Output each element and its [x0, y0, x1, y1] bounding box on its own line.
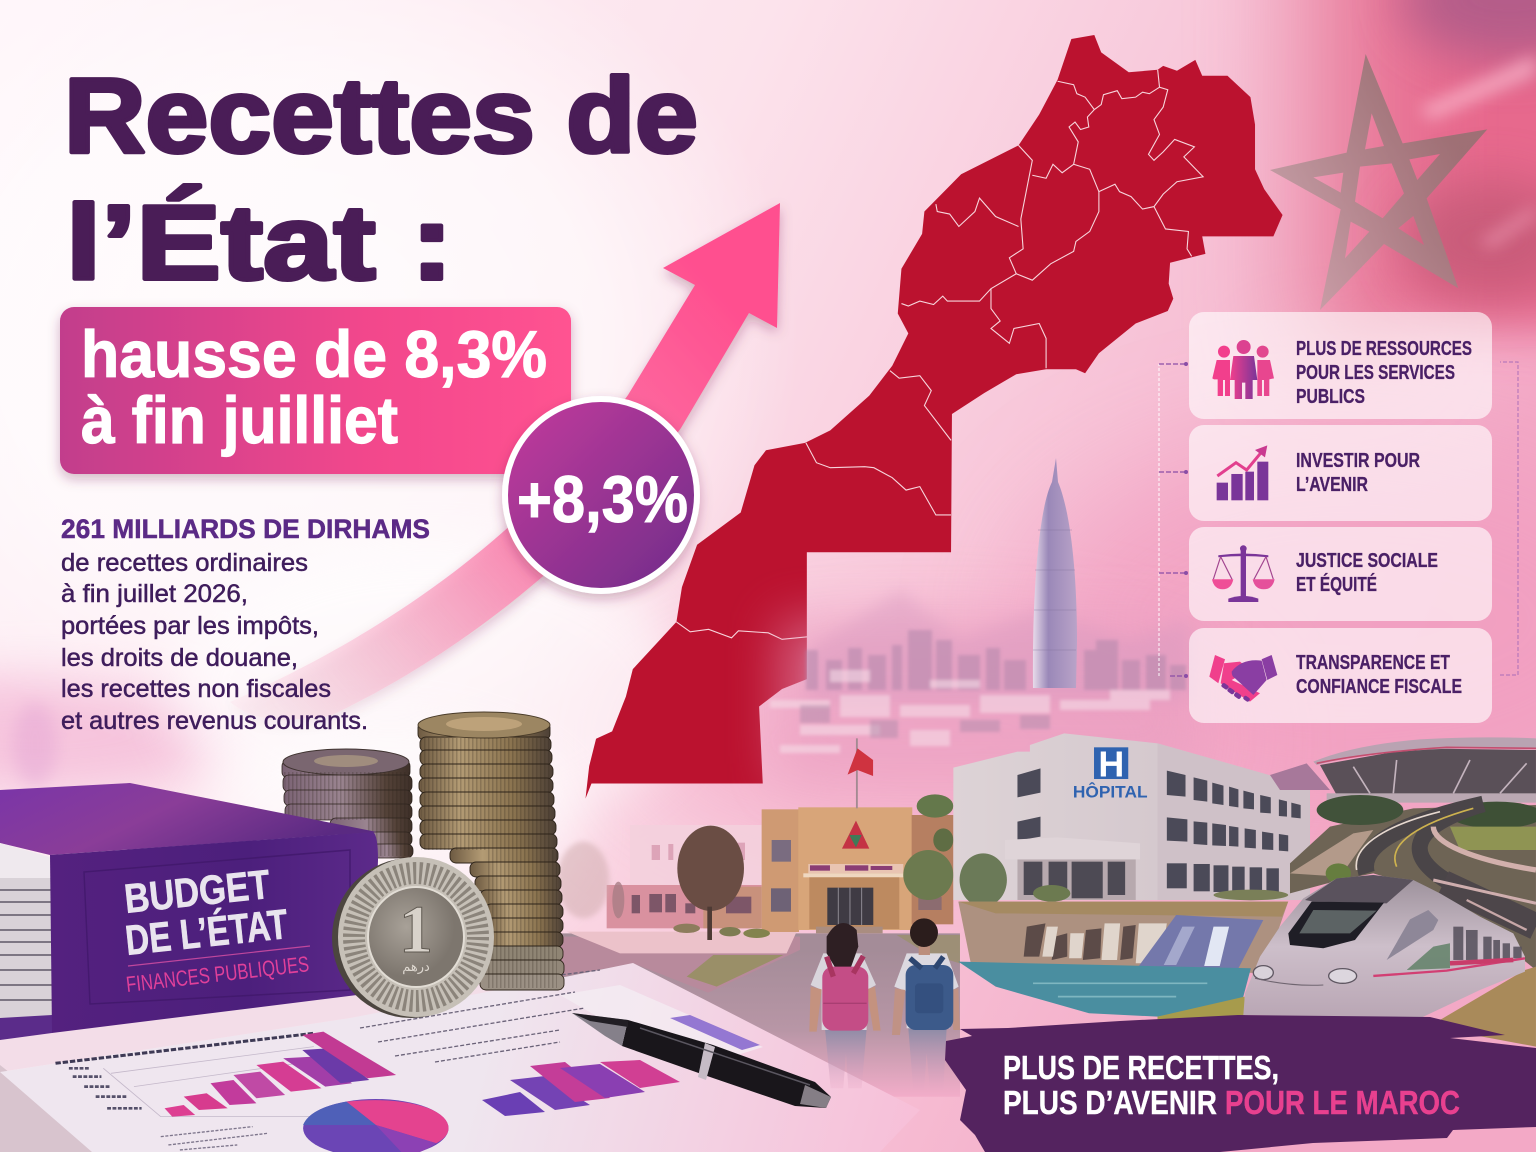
card: justice: JUSTICE SOCIALE: [1296, 550, 1438, 572]
flag: [848, 738, 873, 808]
headline pill: à fin juilliet: [81, 383, 398, 457]
description text: les droits de douane,: [61, 644, 298, 672]
second sheet lines: [360, 970, 600, 1062]
growth arrow: [230, 203, 780, 720]
card: services publics: PLUS DE RESSOURCES: [1296, 338, 1472, 360]
description text: les recettes non fiscales: [61, 675, 331, 703]
closing banner: PLUS D’AVENIR: [1003, 1084, 1217, 1121]
scene: hospital, waterfall and trees: [953, 733, 1310, 1020]
card: transparence: TRANSPARENCE ET: [1296, 652, 1450, 674]
card: justice: ET ÉQUITÉ: [1296, 573, 1377, 596]
closing banner: POUR LE MAROC: [1225, 1084, 1460, 1121]
+8,3% badge: [505, 399, 697, 591]
lake: [958, 962, 1251, 1020]
description text: portées par les impôts,: [61, 612, 319, 640]
small coin stack: [282, 749, 413, 858]
hospital: HÔPITAL: [1073, 781, 1148, 801]
panel: benefits cards: [1189, 312, 1492, 723]
charts and tables on paper: [55, 1032, 449, 1152]
trees and shrubs: [673, 794, 953, 940]
card: investir: INVESTIR POUR: [1296, 450, 1420, 472]
scene: school: [553, 794, 960, 1097]
one dirham coin: [332, 857, 494, 1018]
card: transparence: [1189, 628, 1492, 723]
title: Recettes de: [64, 57, 698, 175]
binder label: DE L’ÉTAT: [123, 900, 290, 964]
description text: [61, 514, 430, 735]
tall coin stack: [418, 712, 564, 990]
binder cover: [0, 783, 377, 855]
binder label: [122, 861, 310, 997]
binder spine: [50, 832, 378, 1033]
stadium: [1270, 737, 1536, 803]
map silhouette: [586, 35, 1283, 798]
binder label: BUDGET: [122, 861, 272, 922]
high-speed train: [1243, 875, 1525, 1018]
card: services publics: PUBLICS: [1296, 386, 1365, 408]
roadside bushes: [1440, 967, 1536, 1047]
card: investir: [1189, 425, 1492, 521]
girl: [809, 923, 881, 1088]
bar chart 2: [482, 1015, 760, 1116]
waterfall: [958, 902, 1288, 973]
school facade: [762, 807, 953, 933]
flag star in the background: [1270, 54, 1487, 310]
closing banner: PLUS DE RECETTES,: [1003, 1049, 1279, 1086]
pie chart: [303, 1099, 449, 1152]
faded left wing: [557, 825, 762, 928]
boy: [892, 918, 960, 1090]
card: services publics: [1189, 312, 1492, 419]
binder pages: [0, 843, 52, 1040]
hospital: [953, 733, 1310, 907]
financial documents: [0, 963, 920, 1152]
bar chart 1: [55, 1032, 402, 1117]
coin stacks: [282, 712, 564, 990]
budget binder: [0, 783, 378, 1040]
card: transparence: CONFIANCE FISCALE: [1296, 676, 1462, 698]
binder label: FINANCES PUBLIQUES: [125, 951, 310, 997]
scene: stadium, highway and train: [1243, 737, 1536, 1047]
tower and hazy skyline: [770, 458, 1200, 780]
title: l’État :: [66, 184, 453, 302]
closing banner: [945, 1015, 1536, 1152]
pen: [572, 1013, 831, 1108]
title: [64, 57, 698, 302]
region borders: [676, 70, 1203, 639]
children with backpacks: [809, 918, 960, 1090]
highway: [1290, 795, 1536, 970]
card: services publics: POUR LES SERVICES: [1296, 362, 1455, 384]
description text: et autres revenus courants.: [61, 707, 368, 735]
description text: de recettes ordinaires: [61, 549, 308, 577]
connector lines: [1159, 362, 1518, 678]
card: justice: [1189, 527, 1492, 621]
card: investir: L’AVENIR: [1296, 474, 1368, 496]
table text on paper: [161, 1127, 268, 1150]
description text: à fin juillet 2026,: [61, 580, 248, 608]
headline pill: [60, 307, 571, 474]
+8,3% badge: +8,3%: [517, 462, 688, 536]
map of Morocco: [586, 35, 1283, 798]
one dirham coin: 1: [399, 891, 433, 967]
grounds: [553, 932, 960, 1097]
one dirham coin: درهم: [402, 960, 430, 975]
headline pill: hausse de 8,3%: [81, 317, 547, 391]
hospital: H: [1098, 743, 1124, 784]
description text: 261 MILLIARDS DE DIRHAMS: [61, 514, 430, 544]
